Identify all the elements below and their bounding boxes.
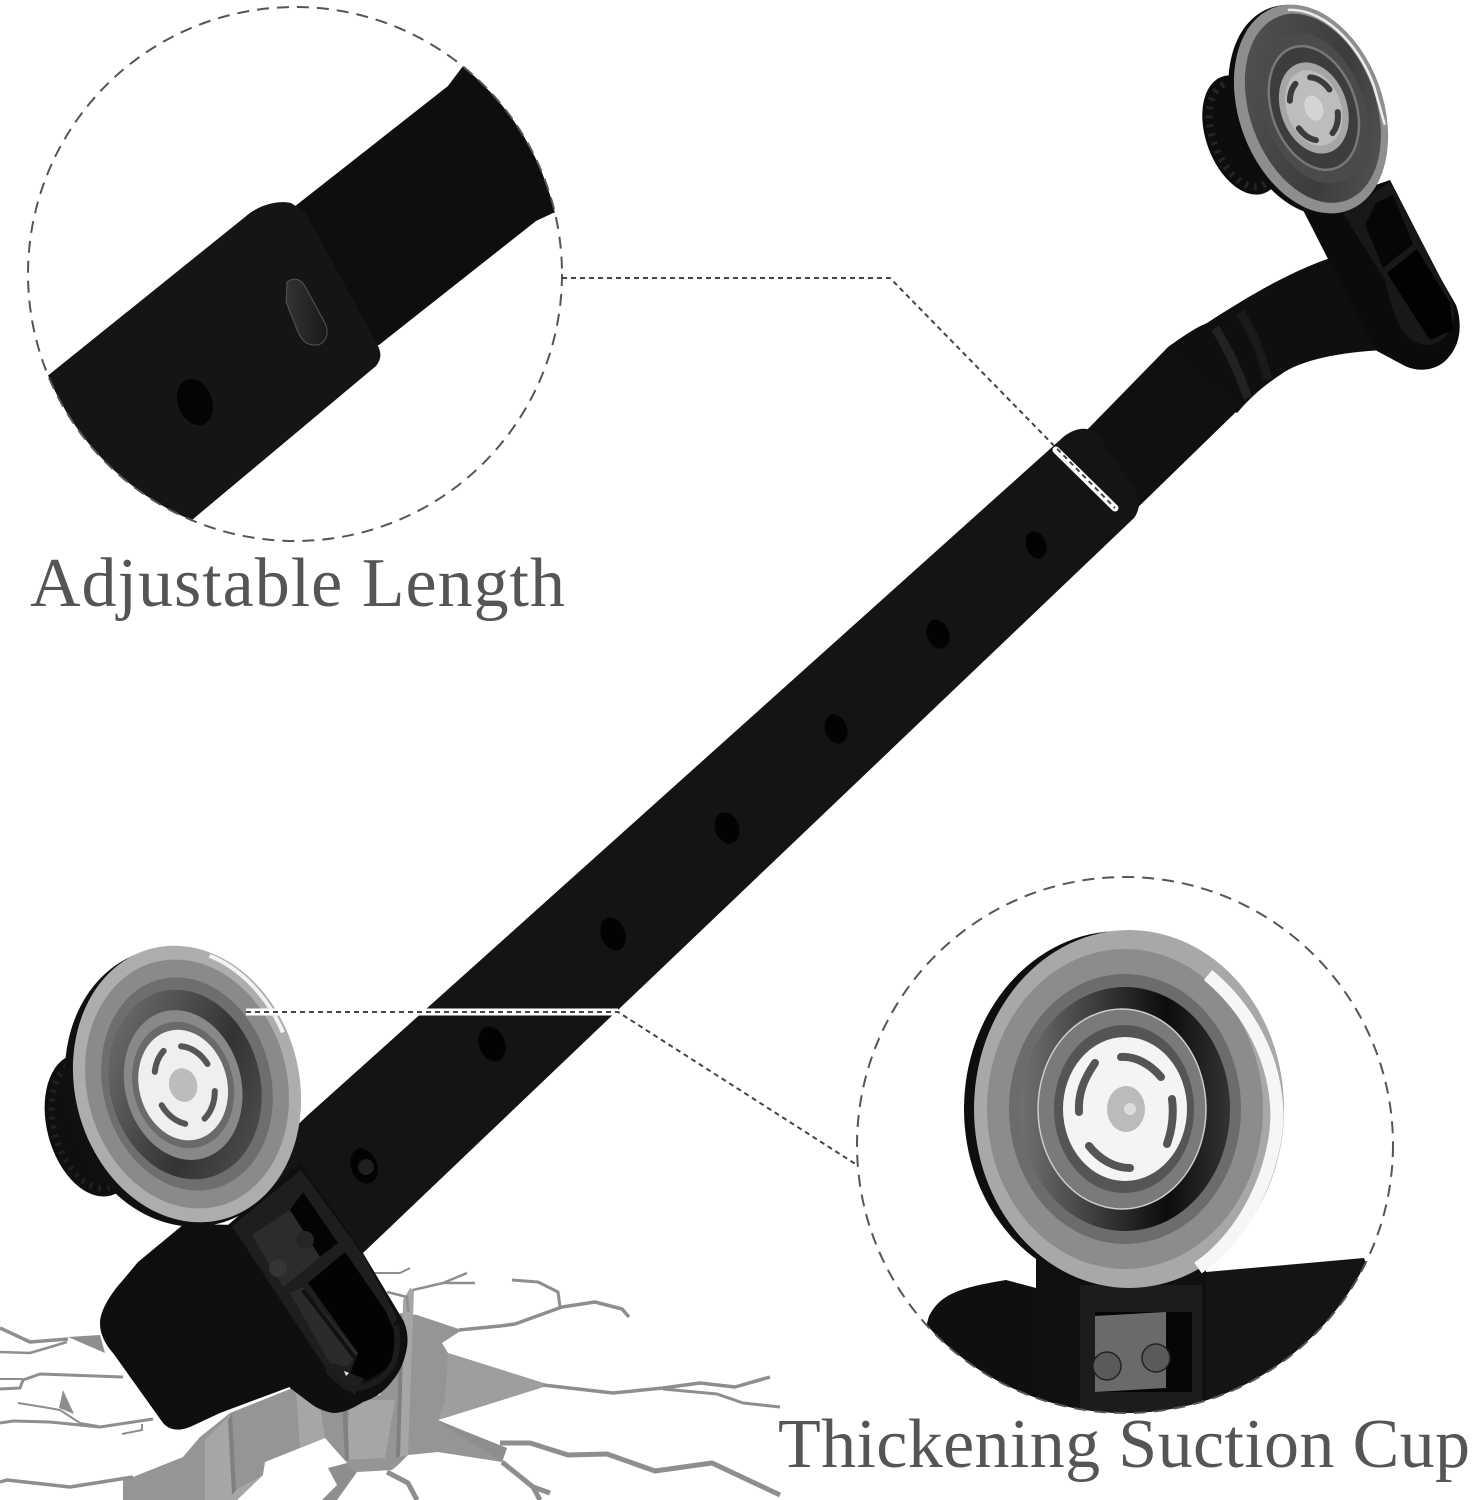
close-up bracket — [1036, 1255, 1206, 1420]
cracked ground graphic — [0, 1268, 780, 1500]
inset: suction cup close-up — [857, 877, 1393, 1420]
close-up thin tube — [296, 66, 555, 345]
collar ridges on curved arm — [1215, 312, 1268, 398]
inset: adjustable length close-up — [28, 7, 620, 541]
lower bracket upper window — [252, 1192, 338, 1287]
dashed circle outline — [28, 7, 562, 541]
lower cup disc — [34, 920, 332, 1253]
label: adjustable length: Adjustable Length — [30, 545, 565, 622]
lower ribbed knob — [30, 1043, 154, 1207]
label: thickening suction cup: Thickening Suction Cup — [778, 1406, 1470, 1483]
dashed circle outline — [857, 877, 1393, 1413]
tube holes — [346, 528, 1050, 1187]
crack central hole — [123, 1313, 550, 1500]
curved upper arm — [1168, 258, 1400, 413]
crack branches — [59, 1335, 507, 1500]
close-up latch button — [286, 279, 327, 345]
crack shaded facets — [205, 1288, 550, 1500]
leader line: adjustable length — [562, 278, 1115, 508]
upper suction cup assembly — [1187, 0, 1460, 370]
upper mount bracket — [1303, 180, 1460, 370]
lower suction cup assembly — [30, 920, 408, 1430]
upper ribbed knob — [1187, 64, 1299, 206]
long lower tube — [240, 429, 1139, 1300]
lower black end block — [100, 1224, 330, 1430]
lower mount bracket — [228, 1163, 408, 1413]
close-up bracket window — [1095, 1312, 1192, 1392]
close-up end block — [926, 1280, 1036, 1398]
close-up adjustment hole — [177, 378, 213, 426]
thin upper tube — [1085, 347, 1238, 515]
lower bracket slot — [290, 1287, 358, 1367]
upper cup disc — [1200, 0, 1416, 238]
close-up cup disc — [964, 930, 1284, 1288]
main telescopic pole with upper tube and curved arm — [240, 258, 1400, 1300]
close-up wide tube — [30, 202, 380, 530]
leader line: suction cup — [246, 1012, 857, 1165]
